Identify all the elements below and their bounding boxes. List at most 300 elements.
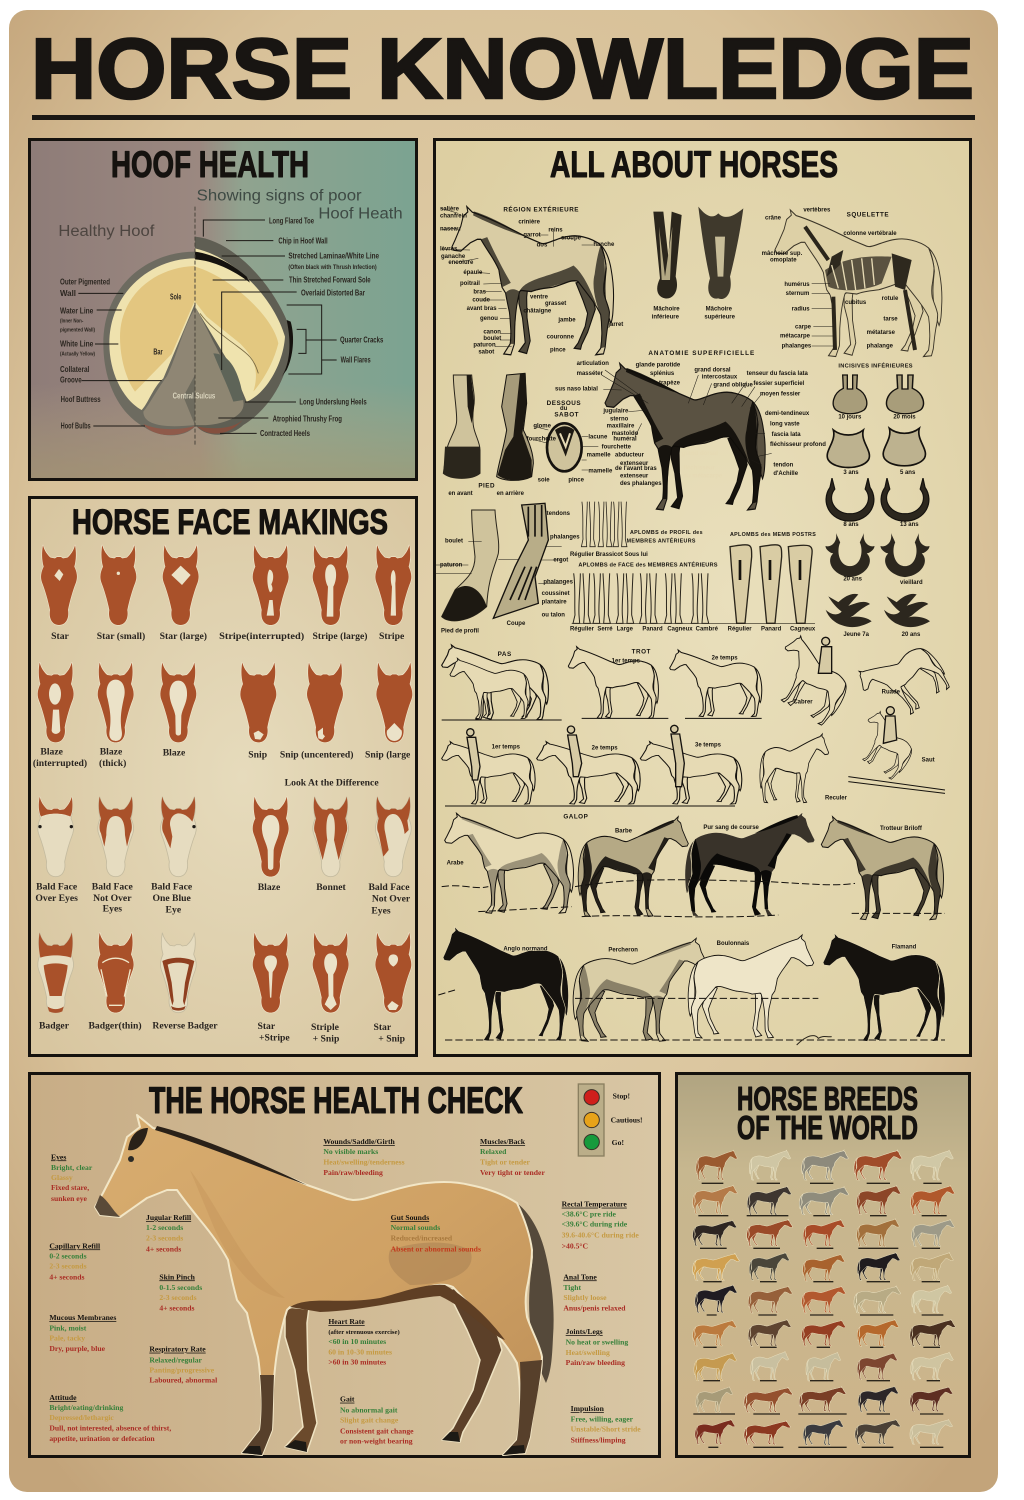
face marking captions: Eye [166,904,182,915]
engravings of gaits and breeds [438,631,953,1045]
engraving: superficial anatomy: trapèze [659,380,681,386]
icon: blaze interrupted [38,662,74,742]
wounds: Wounds/Saddle/Girth [323,1137,396,1146]
face marking captions: Star (large) [160,631,207,642]
muscles: Relaxed [480,1147,507,1156]
engraving: hoof views: en avant [448,491,473,497]
gait labels: 1er temps [612,658,641,664]
far hind leg [442,1285,502,1442]
face marking captions: Blaze [258,882,281,893]
engraving: exterior regions: garrot [523,233,541,239]
face marking captions: Look At the Difference [285,778,379,789]
skin pinch [159,1272,202,1312]
jugular refill [146,1213,191,1254]
icon: bald face not over eyes [98,797,134,877]
engraving: galloping riders [442,742,742,804]
engraving: exterior regions: couronne [547,334,575,340]
engraving: leg alignment diagrams: Large [617,627,634,633]
engraving: exterior regions: paturon [473,343,496,349]
attitude: Depressed/lethargic [49,1413,114,1422]
hoof diagram labels: Wall Flares [341,356,371,365]
gait labels: Reculer [825,795,848,801]
body and near legs [95,1115,542,1455]
icon: star small [100,545,136,625]
engraving: skeleton: crâne [765,215,782,221]
face marking captions: Badger [39,1020,70,1031]
icon: blaze thick [98,662,134,742]
respiratory rate: Panting/progressive [149,1366,215,1375]
legend: traffic light: Stop! [613,1092,630,1101]
engraving: exterior regions: naseau [440,227,461,233]
face marking captions: Star [257,1021,276,1032]
hoof diagram labels: Hoof Buttress [61,395,101,404]
gait labels [492,648,935,820]
hoof diagram labels: Contracted Heels [260,429,310,438]
mucous membranes: Mucous Membranes [49,1313,116,1322]
engraving: hoof views: glome [533,423,552,429]
face marking captions: Stripe [379,631,405,642]
mucous membranes: Dry, purple, blue [49,1344,106,1353]
engraving: exterior regions: crinière [518,219,541,225]
gait labels: TROT [632,648,651,655]
engraving: leg alignment diagrams: Régulier [728,627,752,633]
gait rule and jump bars [442,718,945,806]
breeds row 4 [693,1252,953,1281]
face marking captions: Snip (uncentered) [280,749,353,760]
heading: horse breeds: HORSE BREEDS [737,1080,918,1117]
rectal temperature: 39.6-40.6°C during ride [562,1230,639,1239]
engraving: skeleton: colonne vertébrale [843,231,897,237]
engraving: leg alignment diagrams: APLOMBS des MEMB POSTRS [730,532,816,538]
anal tone [563,1272,626,1312]
breeds row 6 [693,1319,955,1346]
engraving: skeleton: cubitus [845,300,867,306]
engraving: foot profile and section: ergot [553,558,568,564]
engraving: foot profile and section: Coupe [507,621,526,627]
icon: star and stripe [253,933,289,1013]
jugular refill: Jugular Refill [146,1213,191,1222]
icon: reverse badger [160,933,196,1013]
rectal temperature: <38.6°C pre ride [562,1210,617,1219]
engraving: leg alignment diagrams: Panard [761,627,782,633]
engraving: riders [467,637,897,787]
joints [566,1327,628,1367]
gait: Slight gait change [340,1416,399,1425]
engraving: superficial anatomy: tenseur du fascia lata [747,371,809,377]
engraving: superficial anatomy: jugulaire [602,409,629,415]
gait labels: Ruade [882,689,901,695]
face marking captions: Striple [311,1022,340,1033]
heading: of the world: OF THE WORLD [737,1109,918,1146]
engraving: superficial anatomy: huméral [613,437,637,443]
face marking captions: Not Over [93,893,132,904]
eyes: Glassy [51,1173,73,1182]
wounds [323,1137,405,1177]
engraving: exterior regions: pince [550,348,566,354]
face marking captions: Bald Face [36,881,78,892]
engraving: superficial anatomy: grand oblique [713,383,754,389]
icon: bald face one blue eye [160,797,196,877]
engraving: superficial anatomy: masséter [577,371,604,377]
attitude: appetite, urination or defecation [49,1434,155,1443]
engraving: exterior regions: jambe [557,318,576,324]
gait labels: 3e temps [695,743,722,749]
hooves [242,1432,525,1455]
face marking captions: Bald Face [92,881,134,892]
engraving: superficial anatomy: grand dorsal [682,451,718,457]
icon: bald face not over eyes variation [375,797,411,877]
upper breed labels: Trotteur Briloff [880,826,922,832]
lower breed labels: Flamand [892,944,917,950]
engraving: exterior regions: chanfrein [440,213,467,219]
engraving: leg alignment diagrams: Cagneux [790,627,816,633]
engraving: skeleton: mâchoire sup. [762,251,803,257]
impulsion: Unstable/Short stride [571,1425,641,1434]
icon: badger [38,933,74,1013]
face marking captions: Reverse Badger [152,1020,218,1031]
rectal temperature: Rectal Temperature [562,1200,627,1209]
attitude: Attitude [49,1393,77,1402]
face marking captions [33,631,411,1045]
hoof diagram labels: pigmented Wall) [60,327,95,333]
hoof diagram labels [58,188,403,438]
skin pinch: 0-1.5 seconds [159,1283,202,1292]
lower breed labels: Anglo normand [503,947,548,953]
engraving: exterior regions: canon [483,329,501,335]
hoof diagram labels: Quarter Cracks [340,336,384,345]
icon: bald face over eyes [38,797,74,877]
lower breed labels: Percheron [608,948,638,954]
lower breed labels [503,941,917,954]
icon: stripe [375,545,411,625]
engraving: leg alignment diagrams [570,502,816,633]
capillary refill: 0-2 seconds [49,1251,87,1260]
breed horse grid [693,1150,955,1445]
joints: No heat or swelling [566,1337,628,1346]
hoof diagram labels: Healthy Hoof [58,223,155,240]
engraving: leg alignment diagrams: Cambré [696,627,719,633]
breeds row 7 [694,1351,953,1381]
engraving: superficial anatomy [555,350,826,510]
engraving: hoof views: lacune [588,434,608,440]
engraving: leg alignment diagrams: Régulier [570,627,595,633]
capillary refill [49,1241,100,1281]
engraving: hoof views: en arrière [497,491,525,497]
gut sounds [391,1213,481,1254]
icon: stripe and snip [313,933,349,1013]
far foreleg [285,1300,317,1452]
eyes: Fixed stare, [51,1183,89,1192]
engraving: jaw bones: Mâchoire [653,307,680,313]
engraving: leg alignment diagrams: MEMBRES ANTÉRIEURS [627,537,696,545]
capillary refill: Capillary Refill [49,1241,100,1250]
engraving: superficial anatomy: de l'avant bras [615,466,657,472]
engraving: skeleton: phalanges [782,344,812,350]
engraving: exterior regions: poitrail [460,281,480,287]
gait labels: 2e temps [712,655,738,661]
engraving: foot profile and section: ou talon [542,613,565,619]
capillary refill: 2-3 seconds [49,1261,87,1270]
legend: traffic light [578,1084,643,1156]
hoof diagram labels: Long Underslung Heels [299,398,367,407]
engraving: foot profile and section: tendons [547,511,571,517]
engraving: exterior regions: jarret [607,322,623,328]
face marking captions: (interrupted) [33,758,87,769]
engraving: hoof views: SABOT [554,412,579,419]
face marking captions: Star (small) [97,631,145,642]
engraving: exterior regions: dos [537,243,548,249]
icon: snip large [376,662,412,742]
gait labels: PAS [498,651,512,658]
gait labels: 2e temps [592,745,618,751]
engraving: exterior regions: bras [473,289,487,295]
icon: stripe interrupted [253,545,289,625]
engraving: superficial anatomy: long vaste [770,422,800,428]
face marking captions: Star [51,631,70,642]
rectal temperature: >40.5°C [562,1241,588,1250]
engraving: superficial anatomy: articulation [577,361,609,367]
upper breed labels: Pur sang de course [703,825,760,831]
engraving: hoof views: PIED [478,482,495,489]
face marking captions: + Snip [313,1034,339,1045]
icon: blaze [160,662,196,742]
face marking captions: Blaze [100,746,123,757]
engraving: jaw bones: Mâchoire [706,307,733,313]
gait labels: GALOP [563,813,588,820]
gut sounds: Normal sounds [391,1223,440,1232]
wounds: Heat/swelling/tenderness [323,1157,405,1166]
engraving: superficial anatomy: moyen fessier [760,392,801,398]
gait: or non-weight bearing [340,1436,413,1445]
joints: Joints/Legs [566,1327,603,1336]
gait: Consistent gait change [340,1426,414,1435]
title: HORSE KNOWLEDGE [31,22,974,117]
engraving: skeleton: vertèbres [803,208,831,214]
eyes [51,1152,93,1203]
dark belly shading [290,1285,505,1340]
dark lower legs [242,1360,542,1455]
hoof diagram labels: Hoof Bulbs [61,422,91,431]
engraving: incisor teeth: 3 ans [843,470,859,476]
muscles: Muscles/Back [480,1137,526,1146]
heading: horse face makings: HORSE FACE MAKINGS [72,503,388,542]
illustration: buckskin horse [95,1115,554,1455]
heart rate: 60 in 10-30 minutes [328,1347,392,1356]
face marking illustrations [38,545,412,1013]
engraving: foot profile and section: plantaire [542,599,567,605]
engraving: foot profile and section: coussinet [542,591,570,597]
right health checks [323,1137,641,1445]
engraving: superficial anatomy: glande parotide [636,363,681,369]
engraving: foot profile and section: paturon [440,563,463,569]
respiratory rate: Respiratory Rate [149,1345,206,1354]
anal tone: Tight [563,1283,582,1292]
breeds row 5 [695,1285,952,1313]
engraving: exterior regions: encolure [448,260,474,266]
engraving: incisor teeth: INCISIVES INFÉRIEURES [838,361,913,369]
gut sounds: Reduced/increased [391,1234,453,1243]
jugular refill: 2-3 seconds [146,1234,183,1243]
engraving: incisor teeth: 5 ans [900,470,916,476]
face marking captions: Snip [248,749,267,760]
rectal temperature: <39.6°C during ride [562,1220,628,1229]
engraving: exterior regions: ventre [530,294,549,300]
muscles: Tight or tender [480,1157,531,1166]
engraving: exterior regions: lèvres [440,247,458,253]
hoof diagram labels: Thin Stretched Forward Sole [289,276,371,285]
icon: stripe large [313,545,349,625]
panel: hoof health [30,140,416,480]
anal tone: Anal Tone [563,1272,597,1281]
hoof diagram labels: Stretched Laminae/White Line [288,252,379,261]
eyes: Bright, clear [51,1163,93,1172]
hoof diagram labels: Bar [153,347,163,356]
engraving: exterior regions [440,205,623,355]
engraving: walk and trot [442,645,762,720]
heart rate: Heart Rate [328,1317,365,1326]
face marking captions: Bonnet [316,882,347,893]
face marking captions: Eyes [371,905,391,916]
jugular refill: 1-2 seconds [146,1223,183,1232]
engraving: superficial anatomy: intercostaux [702,374,738,380]
gait [340,1395,414,1445]
engraving: incisor teeth [825,361,930,638]
hoof diagram labels: Hoof Heath [318,205,403,222]
mucous membranes: Pink, moist [49,1324,87,1333]
gait labels: 1er temps [492,744,521,750]
engraving: superficial anatomy: d'Achille [773,471,799,477]
hoof diagram labels: Collateral [60,365,89,374]
hoof diagram labels: White Line [60,340,94,349]
icon: snip [240,662,276,742]
engraving: skeleton: métatarse [867,330,896,336]
eyes: Eyes [51,1152,66,1161]
engraving: exterior regions: croupe [561,235,582,241]
hoof diagram labels: (Actually Yellow) [60,351,95,357]
gait: No abnormal gait [340,1405,398,1414]
engraving: exterior regions: boulet [483,336,501,342]
attitude [49,1393,171,1443]
engraving: superficial anatomy: maxillaire [607,423,635,429]
engraving: superficial anatomy: abducteur [615,453,645,459]
hoof diagram labels: Water Line [60,306,94,315]
breeds row 8 [696,1386,953,1413]
upper breed labels: Barbe [615,828,633,834]
engraving: exterior regions: grasset [545,301,566,307]
joints: Pain/raw bleeding [566,1358,625,1367]
hoof diagram labels: Chip in Hoof Wall [278,236,328,245]
jugular refill: 4+ seconds [146,1245,181,1254]
engraving: foot profile and section: phalanges [543,579,574,585]
icon: bonnet [313,797,349,877]
panel: horse breeds of the world [676,1074,970,1456]
respiratory rate [149,1345,217,1385]
engraving: skeleton: omoplate [770,258,797,264]
heart rate [328,1317,400,1366]
engraving: superficial anatomy: sterno [610,417,629,423]
engraving: skeleton: sternum [786,291,809,297]
face marking captions: +Stripe [259,1033,290,1044]
engraving: exterior regions: genou [480,316,498,322]
impulsion: Stiffness/limping [571,1435,626,1444]
engraving: incisor teeth: 20 mois [893,414,916,420]
engraving: superficial anatomy: ANATOMIE SUPERFICIELLE [648,350,755,357]
tail [517,1203,554,1383]
engraving: skeleton: carpe [795,324,812,330]
engraving: incisor teeth: vieillard [900,580,923,586]
icon: snip uncentered [307,662,343,742]
icon: star large [163,545,199,625]
engraving: superficial anatomy: grand dorsal [694,368,731,374]
engraving: superficial anatomy: tendon [773,463,794,469]
face marking captions: Badger(thin) [88,1020,142,1031]
heart rate: >60 in 30 minutes [328,1357,386,1366]
engraving: jaw bones: inférieure [652,314,680,320]
engraving: skeleton: radius [792,307,810,313]
panel: horse face markings [30,498,416,1056]
gait labels: Cabrer [793,699,813,705]
anal tone: Slightly loose [563,1293,607,1302]
engraving: incisor teeth: 20 ans [902,632,921,638]
engraving: incisor teeth: 10 jours [838,414,862,420]
engraving: exterior regions: épaule [463,270,483,276]
gait: Gait [340,1395,355,1404]
skin pinch: Skin Pinch [159,1272,196,1281]
engraving: hoof views: du [560,406,568,412]
title rule [32,115,975,120]
respiratory rate: Laboured, abnormal [149,1376,217,1385]
face marking captions: Star [373,1022,392,1033]
engraving: leg alignment diagrams: Serré [597,627,613,633]
engraving: skeleton: phalange [867,343,894,349]
engraving: superficial anatomy: splénius [650,371,675,377]
engraving: superficial anatomy: extenseur [620,461,649,467]
engraving: exterior regions: sabot [478,349,494,355]
engraving: hoof views: DESSOUS [547,400,581,407]
engraving: incisor teeth: Jeune 7a [843,632,870,638]
heart rate: (after strenuous exercise) [328,1329,400,1336]
breeds row 1 [696,1150,953,1180]
engraving: superficial anatomy: fléchisseur profond [770,442,826,448]
attitude: Dull, not interested, absence of thirst, [49,1424,171,1433]
engraving: leg alignment diagrams: APLOMBS de FACE des MEMBRES ANTÉRIEURS [578,561,718,569]
engraving: hoof views: mamelle [588,469,613,475]
engraving: jaw bones [652,207,743,320]
engraving: leg alignment diagrams: Panard [642,627,663,633]
engraving: superficial anatomy: fourchette [602,444,632,450]
engraving: exterior regions: coude [472,298,491,304]
heart rate: <60 in 10 minutes [328,1337,386,1346]
engraving: leg alignment diagrams: APLOMBS de PROFIL des [630,530,703,536]
engraving: leg alignment diagrams: Régulier Brassicot Sous lui [570,552,648,558]
hoof diagram labels: (Often black with Thrush Infection) [288,264,377,271]
engraving: lower breed row [443,927,945,1041]
engraving: exterior regions: châtaigne [523,309,552,315]
panel: all about horses [434,140,970,1056]
eyes: sunken eye [51,1194,88,1203]
legend: traffic light: Cautious! [611,1115,643,1124]
hoof diagram labels: Sole [170,292,182,301]
face marking captions: Blaze [163,747,186,758]
breed caption marks [693,1183,947,1447]
engraving: hoof views: soie [538,478,550,484]
heading: the horse health check: THE HORSE HEALTH CHECK [149,1080,523,1121]
face marking captions: Eyes [103,904,122,915]
heading: all about horses: ALL ABOUT HORSES [550,144,838,185]
wounds: No visible marks [323,1147,378,1156]
rectal temperature [562,1200,639,1250]
engraving: superficial anatomy: fessier superficiel [753,381,805,387]
